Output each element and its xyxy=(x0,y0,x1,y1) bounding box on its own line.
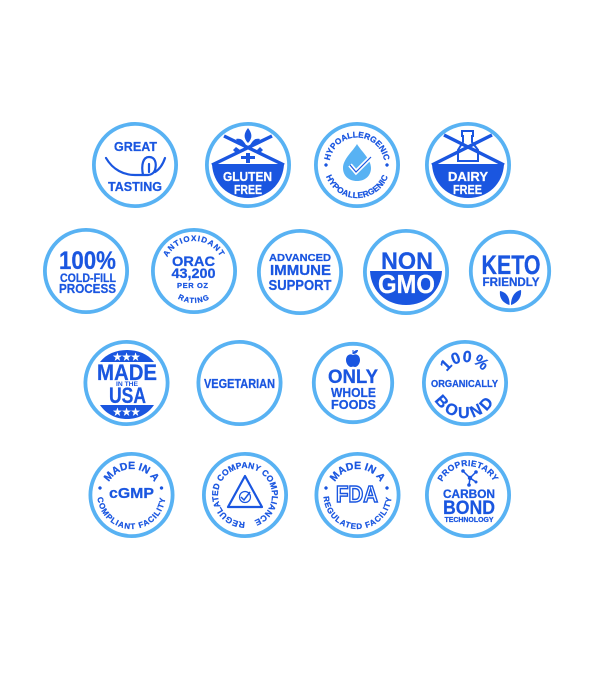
curved text: bottom: HYPOALLERGENIC xyxy=(326,174,388,198)
icon: bottle crossed out xyxy=(432,131,504,165)
badge: fda xyxy=(314,452,400,538)
label: organically: ORGANICALLY xyxy=(431,378,498,390)
badge: advanced immune support xyxy=(259,231,341,313)
label: carbon: CARBON xyxy=(443,489,495,501)
label: process: PROCESS xyxy=(59,281,116,296)
badge: keto friendly xyxy=(471,232,549,310)
label: free: FREE xyxy=(234,183,262,197)
label: cgmp: cGMP xyxy=(109,485,154,502)
badge: 100% cold-fill process xyxy=(45,230,127,312)
badge: gluten free xyxy=(207,124,289,206)
label: in the: IN THE xyxy=(116,382,138,388)
stars: top: ★★★ xyxy=(113,352,141,362)
badge: proprietary carbon bond xyxy=(425,452,511,538)
label: free: FREE xyxy=(453,182,482,197)
curved text: rating: RATING xyxy=(178,294,209,304)
bowl panel xyxy=(432,164,504,198)
label: per oz: PER OZ xyxy=(177,281,208,290)
label: immune: IMMUNE xyxy=(270,263,331,279)
label: technology: TECHNOLOGY xyxy=(444,517,494,524)
icon: triangle with check xyxy=(228,476,262,507)
label: foods: FOODS xyxy=(331,397,376,412)
label: bond: BOND xyxy=(443,497,495,519)
curved text: bound: BOUND xyxy=(434,394,492,418)
label: made: MADE xyxy=(97,360,157,385)
badge: 100% organically bound xyxy=(422,340,508,426)
label: fda logo: FDA xyxy=(336,481,378,507)
badge: non gmo xyxy=(365,231,447,313)
bowl panel xyxy=(212,164,284,198)
badge: regulated company compliance xyxy=(202,452,288,538)
curved text: antioxidant: ANTIOXIDANT xyxy=(164,235,225,258)
separator dots xyxy=(98,486,163,490)
badge: vegetarian xyxy=(198,342,281,424)
separator dots xyxy=(324,486,389,490)
curved text: regulated company compliance: REGULATED COMPANY COMPLIANCE xyxy=(212,462,278,528)
label: whole: WHOLE xyxy=(331,385,376,400)
label: support: SUPPORT xyxy=(268,278,332,294)
icon: leaves xyxy=(500,290,521,305)
label: tasting: TASTING xyxy=(108,179,162,194)
icon: wheat crossed out xyxy=(212,128,284,165)
bottom banner xyxy=(100,405,154,419)
badge: great tasting xyxy=(94,124,176,206)
icon: smile with tongue xyxy=(106,157,165,175)
label: keto: KETO xyxy=(482,250,540,280)
icon: water drop with check xyxy=(343,144,371,181)
label: gmo: GMO xyxy=(378,269,435,299)
top banner xyxy=(100,350,154,362)
badge: hypoallergenic xyxy=(314,122,400,208)
curved text: made in a: MADE IN A xyxy=(329,462,384,482)
label: friendly: FRIENDLY xyxy=(482,277,540,289)
label: orac: ORAC xyxy=(172,253,215,269)
curved text: made in a: MADE IN A xyxy=(103,462,158,482)
label: non: NON xyxy=(381,248,433,275)
bowl panel xyxy=(370,271,442,305)
badge: cgmp xyxy=(88,452,174,538)
curved text: proprietary: PROPRIETARY xyxy=(437,460,499,482)
label: advanced: ADVANCED xyxy=(269,252,331,264)
icon: separator dots xyxy=(324,163,389,167)
label: dairy: DAIRY xyxy=(448,169,488,184)
curved text: regulated facility: REGULATED FACILITY xyxy=(323,496,392,530)
icon: apple xyxy=(346,350,360,367)
label: great: GREAT xyxy=(114,139,157,154)
badge: only whole foods xyxy=(314,344,392,422)
curved text: compliant facility: COMPLIANT FACILITY xyxy=(98,497,166,530)
label: vegetarian: VEGETARIAN xyxy=(204,377,275,391)
label: 100%: 100% xyxy=(59,247,116,275)
stars: bottom: ★★★ xyxy=(113,407,141,417)
icon: molecule xyxy=(461,469,478,487)
label: usa: USA xyxy=(109,383,146,408)
curved text: 100%: 100% xyxy=(440,350,488,372)
label: cold-fill: COLD-FILL xyxy=(60,271,116,285)
label: 43,200: 43,200 xyxy=(172,265,216,281)
badge: antioxidant orac xyxy=(151,228,237,314)
badge: made in the usa xyxy=(85,342,168,424)
badge: dairy free xyxy=(427,124,509,206)
label: gluten: GLUTEN xyxy=(223,170,272,184)
curved text: top: HYPOALLERGENIC xyxy=(324,132,390,160)
label: only: ONLY xyxy=(328,367,378,388)
